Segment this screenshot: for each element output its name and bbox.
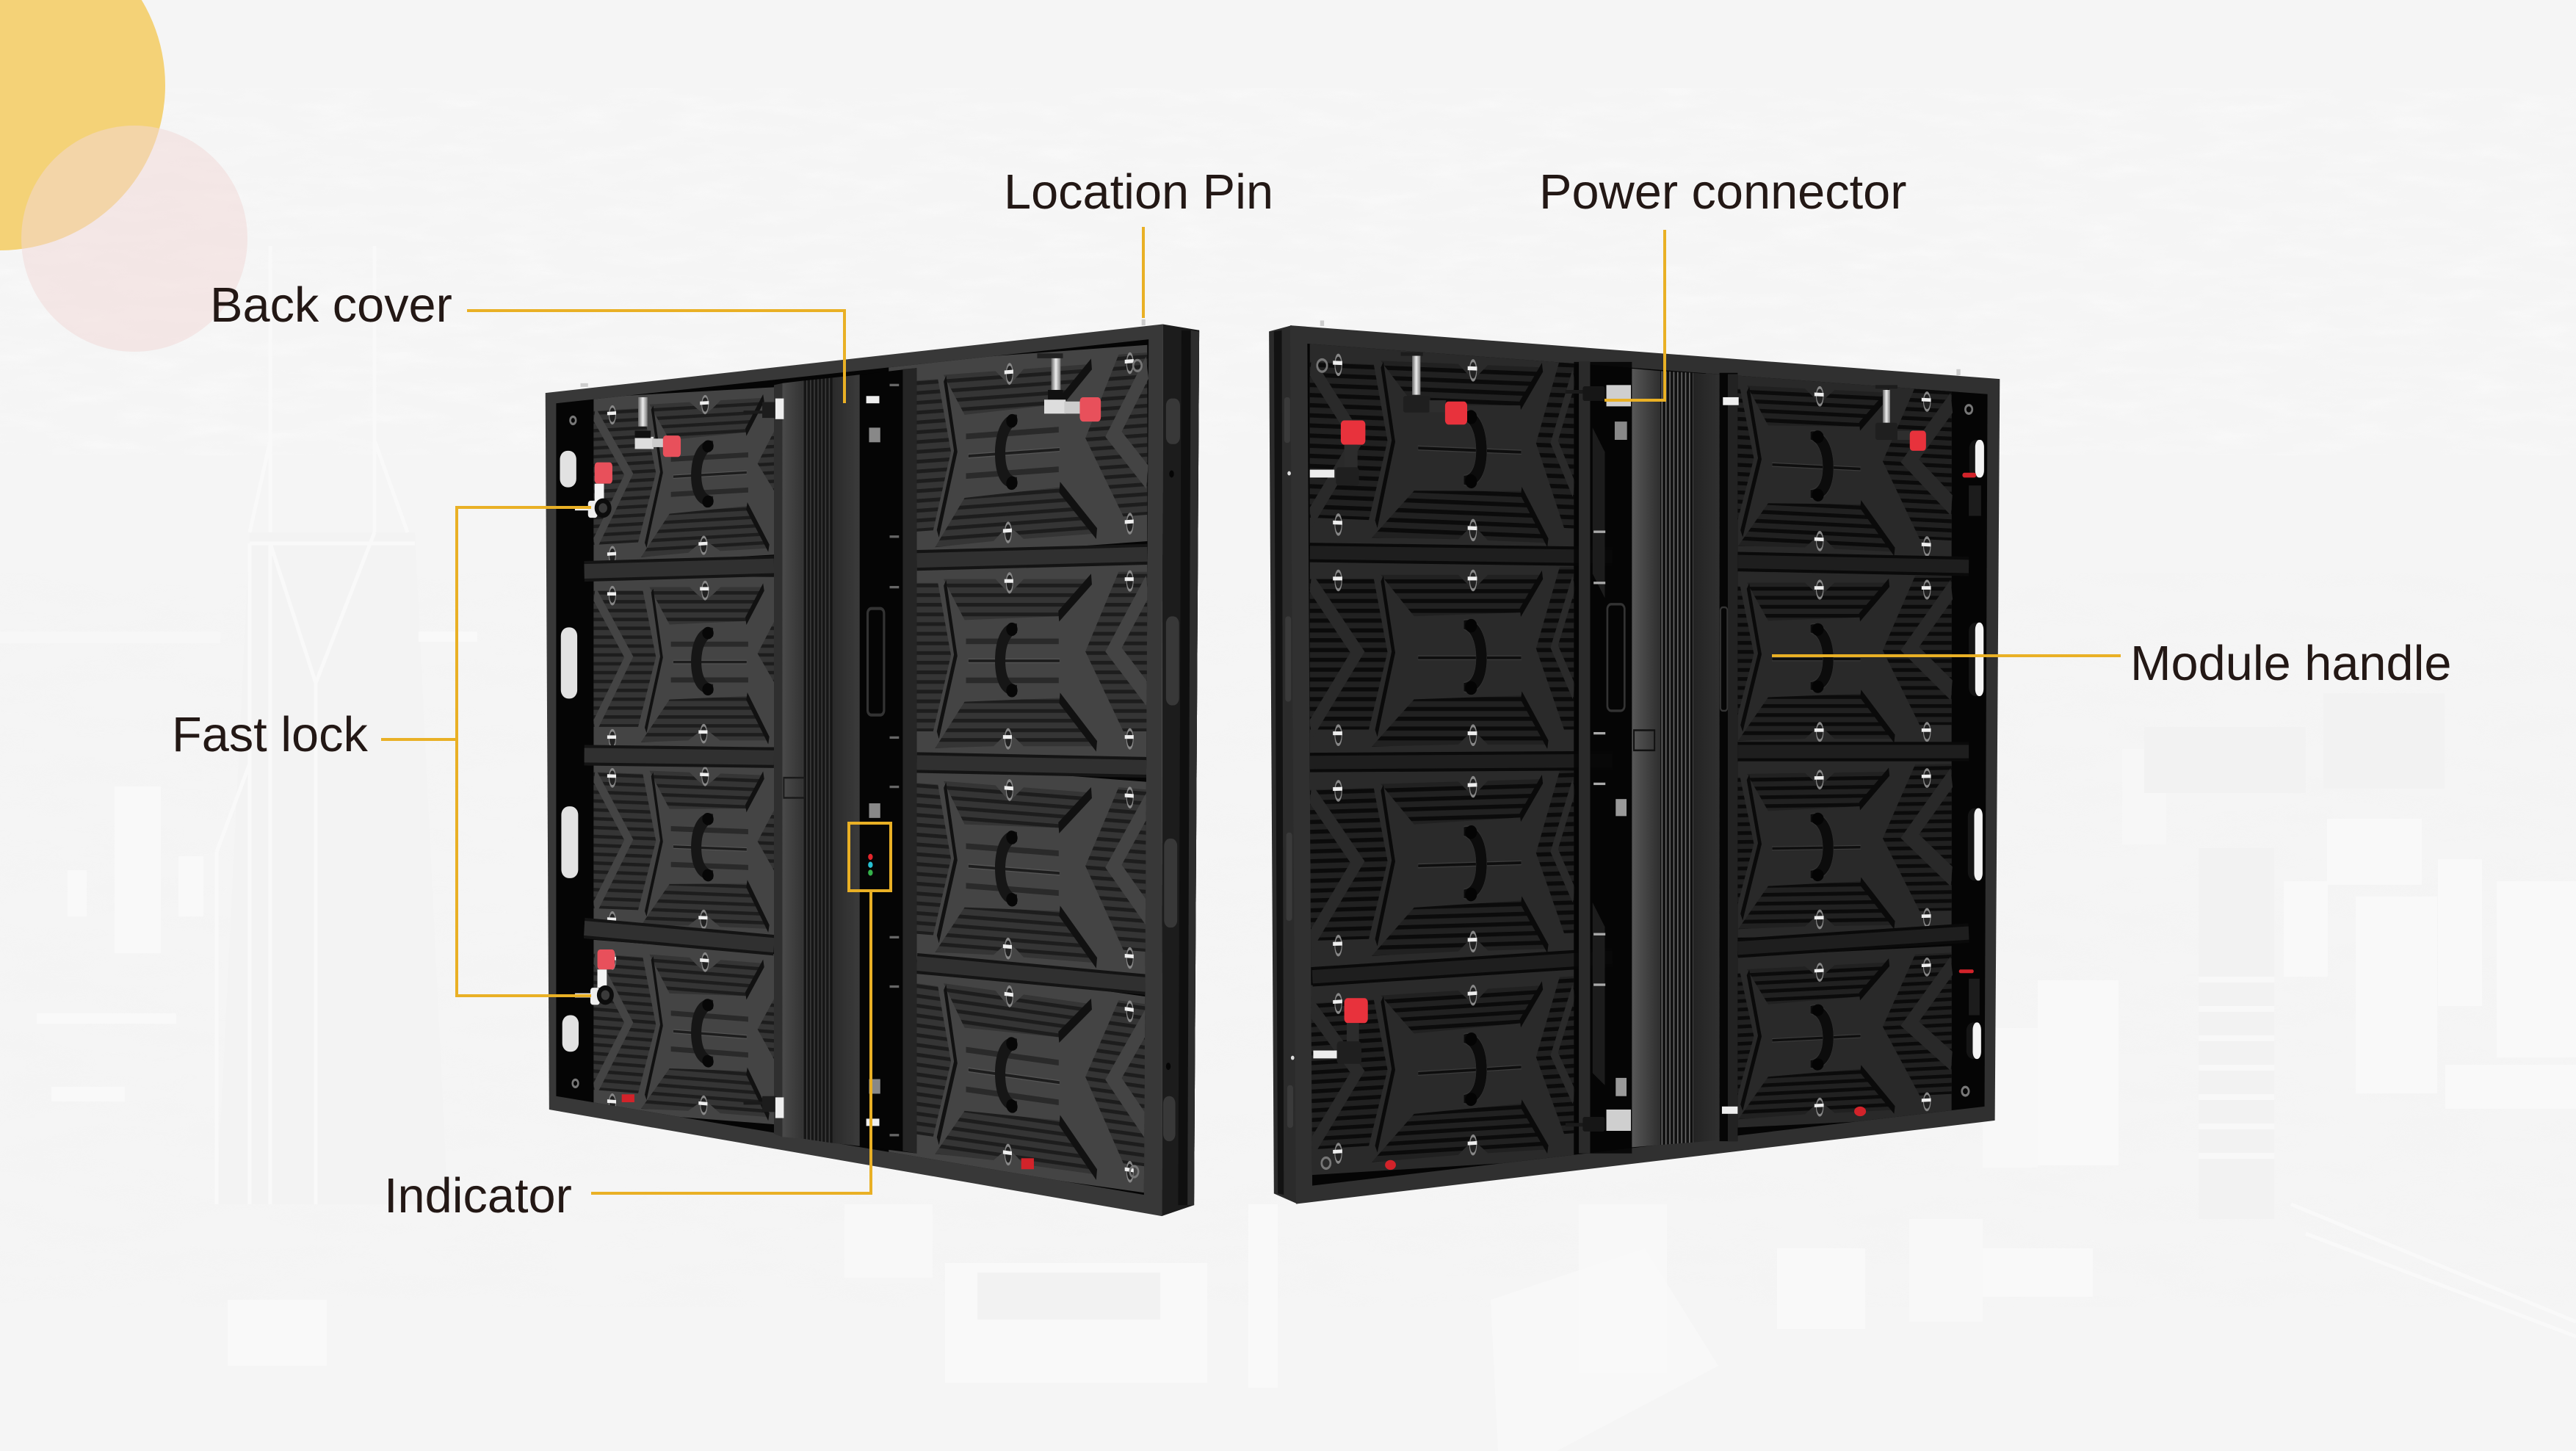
leader line: module handle	[1772, 654, 2121, 657]
white clips	[1722, 397, 1739, 1114]
red tabs and side sockets	[1385, 473, 1981, 1170]
callout: fast lock	[172, 507, 591, 996]
decorative pink circle	[21, 126, 247, 352]
left cabinet: location pins	[581, 319, 1146, 387]
leader line: location pin	[1142, 227, 1145, 318]
power connectors	[1566, 385, 1631, 1132]
indicator LEDs	[868, 854, 873, 876]
right cabinet: side oval openings	[1967, 440, 1985, 1059]
fast lock: top left column	[1401, 352, 1467, 424]
right cabinet: back view	[1269, 320, 2000, 1204]
left cabinet: horizontal tubes	[585, 554, 1147, 985]
right cabinet: LED modules	[1310, 342, 1969, 1175]
left cabinet: black inner tray	[556, 339, 1148, 1195]
fast lock: lower side	[1313, 998, 1368, 1064]
right cabinet: black inner tray	[1307, 344, 1988, 1186]
left cabinet: LED modules	[585, 345, 1147, 1193]
callout: back cover	[210, 278, 844, 403]
left cabinet: back cover	[782, 374, 860, 1146]
right cabinet: side profile strip	[1269, 325, 1298, 1204]
right cabinet: horizontal tubes	[1310, 552, 1969, 977]
fast lock: top right column	[1037, 353, 1101, 421]
leader line: power connector	[1604, 230, 1665, 400]
right cabinet: back cover	[1632, 369, 1727, 1147]
label: back cover: Back cover	[210, 278, 452, 333]
left cabinet: side oval openings	[560, 451, 579, 1052]
left cabinet: outer frame	[546, 324, 1162, 1216]
fast lock: top right column	[1875, 385, 1926, 451]
decorative yellow circle	[0, 0, 165, 250]
power connectors	[744, 399, 784, 1118]
label: power connector: Power connector	[1539, 165, 1906, 220]
left cabinet: back view	[546, 319, 1199, 1216]
left cabinet: centre channel	[774, 368, 917, 1154]
fast lock: upper side	[1310, 420, 1365, 485]
fast lock: upper side	[575, 463, 612, 518]
leader bracket: fast lock	[381, 507, 591, 996]
label: location pin: Location Pin	[1004, 165, 1273, 220]
fast lock: lower side	[575, 949, 615, 1005]
callout: indicator	[384, 823, 891, 1223]
red tabs	[622, 1094, 1034, 1169]
leader line: back cover	[467, 311, 844, 403]
right cabinet: outer frame	[1290, 325, 2000, 1204]
left cabinet: side profile strip	[1162, 324, 1199, 1216]
left cabinet: location rings	[571, 360, 1142, 1177]
label: module handle: Module handle	[2130, 637, 2452, 691]
fast lock: top left column	[635, 397, 681, 457]
callout: power connector	[1539, 165, 1906, 400]
right cabinet: location pins	[1320, 320, 1961, 375]
indicator highlight box and leader line	[591, 823, 891, 1193]
right cabinet: location rings	[1317, 360, 1972, 1168]
right cabinet: centre channel	[1574, 362, 1737, 1154]
label: fast lock: Fast lock	[172, 708, 368, 762]
label: indicator: Indicator	[384, 1169, 572, 1223]
